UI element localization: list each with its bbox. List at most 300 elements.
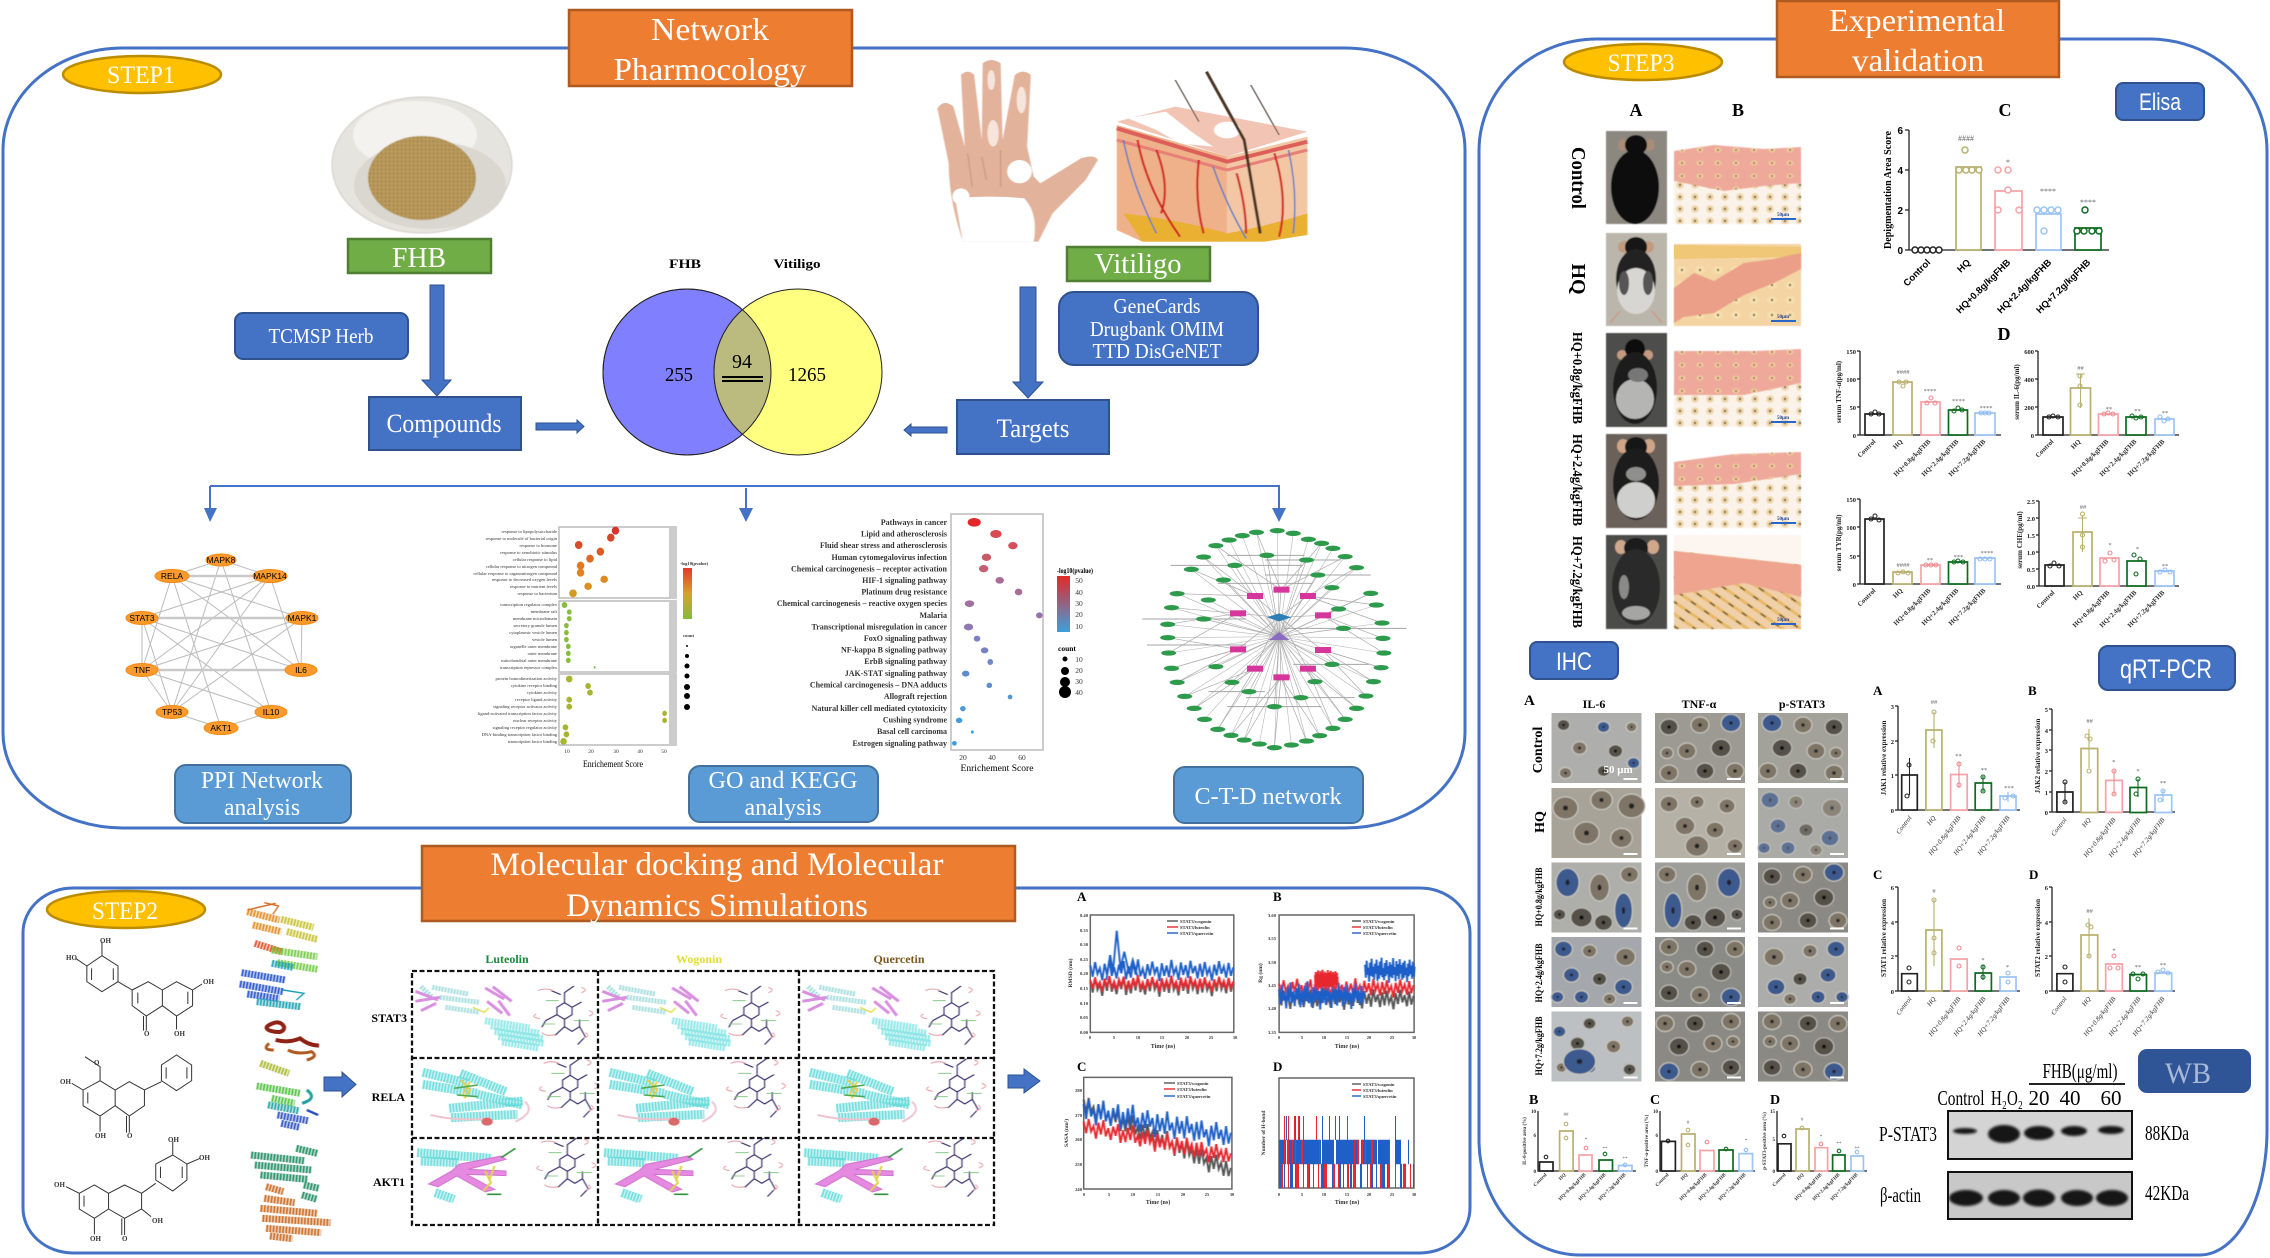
chart: RMSD: 0 bbox=[1089, 1035, 1092, 1040]
chart: RMSD: 20 bbox=[1185, 1035, 1190, 1040]
chart: western blot bbox=[1879, 1059, 2189, 1219]
chart: serum TYR: 0 bbox=[1853, 582, 1856, 589]
chart: serum CHE: 0.0 bbox=[2027, 584, 2035, 591]
chart: serum CHE: 1.0 bbox=[2027, 550, 2035, 557]
protein: RELA ribbon bbox=[257, 1022, 319, 1127]
labels: IHC rows: HQ+2.4g/kgFHB bbox=[1535, 943, 1545, 1002]
molecule: wogonin bbox=[60, 1055, 192, 1140]
heading: ligand columns: Luteolin bbox=[485, 952, 529, 966]
chart: KEGG enrichment: Human cytomegalovirus infection bbox=[831, 553, 948, 562]
chart: KEGG enrichment: 20 bbox=[1075, 666, 1083, 675]
molecule: luteolin: OH bbox=[100, 937, 111, 945]
chart: KEGG enrichment: Enrichement Score bbox=[960, 763, 1034, 773]
chart: serum TYR: HQ bbox=[1892, 587, 1904, 600]
title: Network Pharmacology: Pharmocology bbox=[614, 51, 806, 87]
chart: hydrogen bonds: STAT3/luteolin bbox=[1363, 1088, 1393, 1093]
chart: SASA bbox=[1063, 1059, 1235, 1206]
chart: KEGG enrichment: HIF-1 signaling pathway bbox=[862, 576, 947, 585]
box: disease databases: Drugbank OMIM bbox=[1090, 317, 1224, 341]
chart: serum TNF-alpha: 100 bbox=[1846, 377, 1856, 384]
molecule: quercetin bbox=[54, 1136, 210, 1243]
chart: RMSD: 0.35 bbox=[1080, 928, 1089, 933]
chart: radius of gyration: 10 bbox=[1322, 1035, 1327, 1040]
chart: serum CHE: 0.5 bbox=[2027, 567, 2036, 574]
badge: STEP2 bbox=[47, 891, 205, 928]
chart: STAT2 expression: HQ bbox=[2080, 996, 2093, 1009]
chart: serum CHE: HQ+7.2g/kgFHB bbox=[2127, 589, 2167, 629]
chart: IL-6 positive area: HQ+2.4g/kgFHB bbox=[1578, 1172, 1608, 1202]
chart: STAT1 expression: HQ+2.4g/kgFHB bbox=[1952, 996, 1988, 1039]
chart: STAT1 expression bbox=[1873, 867, 2020, 1039]
chart: JAK2 expression: HQ bbox=[2080, 817, 2093, 830]
heading: ligand columns: Quercetin bbox=[873, 952, 925, 966]
images: IHC micrographs bbox=[1551, 713, 1848, 1082]
chart: western blot: 88KDa bbox=[2145, 1121, 2189, 1145]
heading: IHC columns: p-STAT3 bbox=[1779, 697, 1825, 711]
chart: JAK2 expression: HQ+2.4g/kgFHB bbox=[2107, 817, 2143, 860]
chart: p-STAT3 positive area: 0 bbox=[1772, 1170, 1776, 1175]
chart: STAT2 expression: 2 bbox=[2045, 954, 2048, 961]
labels: mouse groups: HQ bbox=[1567, 263, 1589, 295]
chart: serum TYR: **** bbox=[1980, 550, 1994, 557]
molecule: wogonin: OH bbox=[95, 1132, 106, 1140]
arrow: docking to dynamics bbox=[1008, 1069, 1040, 1093]
title: Molecular docking and Molecular Dynamics Simulations: Molecular docking and Molecular bbox=[490, 847, 944, 883]
chart: RMSD: 0.10 bbox=[1080, 1001, 1089, 1006]
chart: serum CHE: * bbox=[2136, 546, 2139, 553]
chart: PPI network: MAPK1 bbox=[288, 613, 317, 623]
chart: PPI network: TNF bbox=[134, 665, 150, 675]
chart: STAT1 expression: 2 bbox=[1891, 954, 1894, 961]
box: GO and KEGG analysis: analysis bbox=[744, 795, 822, 821]
chart: RMSD: Time (ns) bbox=[1151, 1043, 1175, 1050]
chart: KEGG enrichment: -log10(pvalue) bbox=[1057, 567, 1094, 575]
chart: p-STAT3 positive area: HQ+2.4g/kgFHB bbox=[1812, 1172, 1842, 1202]
molecule: wogonin: O bbox=[94, 1059, 100, 1067]
chart: GO enrichment: cellular response to lipid bbox=[513, 557, 558, 562]
chart: STAT2 expression: * bbox=[2112, 948, 2116, 954]
chart: RMSD: 15 bbox=[1160, 1035, 1165, 1040]
chart: JAK2 expression: 4 bbox=[2045, 728, 2049, 735]
heading: column letters: B bbox=[1732, 100, 1744, 120]
box: Compounds bbox=[369, 397, 521, 450]
chart: hydrogen bonds: 25 bbox=[1390, 1192, 1395, 1197]
chart: STAT2 expression: HQ+0.8g/kgFHB bbox=[2082, 996, 2118, 1039]
chart: TNF-alpha positive area: HQ+0.8g/kgFHB bbox=[1679, 1172, 1709, 1202]
chart: SASA: 15 bbox=[1156, 1192, 1161, 1197]
chart: IL-6 positive area: 6 bbox=[1534, 1134, 1536, 1139]
chart: p-STAT3 positive area bbox=[1763, 1093, 1867, 1202]
badge: STEP3: STEP3 bbox=[1608, 50, 1674, 77]
chart: STAT2 expression: ** bbox=[2135, 964, 2141, 971]
chart: SASA: 270 bbox=[1075, 1113, 1083, 1118]
chart: radius of gyration: 3.55 bbox=[1268, 936, 1277, 941]
chart: radius of gyration: 3.35 bbox=[1268, 1030, 1277, 1035]
molecule: wogonin: O bbox=[127, 1132, 133, 1140]
chart: depigmentation area score: #### bbox=[1958, 134, 1974, 143]
chart: serum TNF-alpha: 0 bbox=[1853, 433, 1856, 440]
chart: KEGG enrichment: Platinum drug resistance bbox=[861, 588, 947, 596]
box: PPI Network analysis bbox=[175, 765, 351, 823]
chart: serum CHE: 2.0 bbox=[2027, 516, 2035, 523]
chart: PPI network: IL10 bbox=[263, 707, 280, 717]
chart: RMSD: 0.15 bbox=[1080, 986, 1089, 991]
chart: GO enrichment: response to decreased oxygen levels bbox=[492, 577, 557, 582]
chart: STAT1 expression: STAT1 relative expression bbox=[1880, 899, 1888, 977]
chart: p-STAT3 positive area: 5 bbox=[1772, 1138, 1776, 1143]
chart: radius of gyration: 25 bbox=[1390, 1035, 1395, 1040]
chart: JAK1 expression: A bbox=[1873, 683, 1883, 698]
chart: KEGG enrichment: Basal cell carcinoma bbox=[877, 727, 947, 736]
chart: RMSD: 0.05 bbox=[1080, 1015, 1089, 1020]
title: Molecular docking and Molecular Dynamics Simulations bbox=[422, 846, 1015, 924]
chart: PPI network: MAPK8 bbox=[207, 555, 236, 565]
labels: IHC rows: HQ+0.8g/kgFHB bbox=[1535, 867, 1545, 926]
images: IHC micrographs: 50 μm bbox=[1604, 764, 1633, 776]
chart: radius of gyration: 20 bbox=[1367, 1035, 1372, 1040]
chart: IL-6 positive area: HQ+7.2g/kgFHB bbox=[1598, 1172, 1628, 1202]
chart: STAT2 expression: ## bbox=[2086, 908, 2094, 915]
chart: GO enrichment: transcription factor binding bbox=[508, 739, 558, 744]
chart: serum IL-6: ** bbox=[2106, 406, 2112, 413]
panel: step 3 experimental validation bbox=[1479, 39, 2267, 1255]
chart: IL-6 positive area: Control bbox=[1533, 1172, 1549, 1188]
box: qRT-PCR: qRT-PCR bbox=[2120, 654, 2212, 684]
chart: GO enrichment: signaling receptor regulator activity bbox=[493, 725, 558, 730]
chart: radius of gyration: 0 bbox=[1278, 1035, 1281, 1040]
chart: serum TYR: serum TYR(pg/ml) bbox=[1835, 514, 1843, 571]
chart: RMSD: STAT3/wogonin bbox=[1180, 919, 1212, 924]
chart: p-STAT3 positive area: ** bbox=[1836, 1142, 1842, 1147]
chart: SASA: 240 bbox=[1075, 1187, 1083, 1192]
box: GO and KEGG analysis bbox=[689, 766, 878, 822]
arrow: vitiligo to targets bbox=[1013, 287, 1043, 398]
molecule: luteolin: O bbox=[144, 1030, 150, 1038]
chart: GO enrichment: nuclear receptor activity bbox=[513, 718, 558, 723]
heading: IHC columns: TNF-α bbox=[1682, 697, 1717, 711]
heading: IHC columns: IL-6 bbox=[1583, 697, 1605, 711]
chart: GO enrichment: 50 bbox=[661, 749, 667, 755]
chart: hydrogen bonds: STAT3/quercetin bbox=[1363, 1094, 1397, 1099]
chart: p-STAT3 positive area: p-STAT3-positive area (%) bbox=[1763, 1112, 1768, 1170]
title: Network Pharmacology bbox=[569, 10, 852, 87]
chart: p-STAT3 positive area: HQ+7.2g/kgFHB bbox=[1830, 1172, 1860, 1202]
venn diagram: 94 bbox=[732, 351, 752, 373]
chart: RMSD: STAT3/quercetin bbox=[1180, 931, 1214, 936]
chart: serum TNF-alpha: HQ+7.2g/kgFHB bbox=[1948, 438, 1988, 478]
chart: KEGG enrichment bbox=[777, 514, 1094, 773]
chart: STAT2 expression: 6 bbox=[2045, 885, 2049, 892]
box: qRT-PCR bbox=[2099, 646, 2235, 690]
chart: serum TYR: HQ+2.4g/kgFHB bbox=[1921, 587, 1961, 627]
chart: radius of gyration: 3.45 bbox=[1268, 983, 1277, 988]
title: Experimental validation: validation bbox=[1852, 42, 1984, 78]
chart: GO enrichment: transcription regulator complex bbox=[500, 602, 558, 607]
chart: KEGG enrichment: 20 bbox=[959, 753, 967, 762]
chart: SASA: 0 bbox=[1083, 1192, 1086, 1197]
chart: KEGG enrichment: 60 bbox=[1018, 753, 1026, 762]
chart: serum TNF-alpha: HQ bbox=[1892, 438, 1904, 451]
chart: STAT1 expression: C bbox=[1873, 867, 1882, 882]
title: Network Pharmacology: Network bbox=[651, 11, 769, 47]
molecule: quercetin: OH bbox=[199, 1154, 210, 1162]
molecule: luteolin: OH bbox=[203, 978, 214, 986]
chart: serum TNF-alpha: HQ+0.8g/kgFHB bbox=[1893, 438, 1933, 478]
chart: GO enrichment: outer membrane bbox=[528, 651, 557, 656]
venn diagram: 255 bbox=[665, 364, 693, 386]
chart: RMSD: A bbox=[1077, 889, 1087, 904]
chart: SASA: 30 bbox=[1230, 1192, 1235, 1197]
labels: IHC rows: HQ bbox=[1533, 811, 1548, 833]
chart: STAT1 expression: HQ+0.8g/kgFHB bbox=[1927, 996, 1963, 1039]
chart: PPI network: RELA bbox=[161, 571, 183, 581]
label: FHB: FHB bbox=[392, 243, 446, 274]
chart: STAT1 expression: # bbox=[1932, 888, 1936, 895]
images: skin sections: 50μm bbox=[1777, 315, 1790, 320]
chart: GO enrichment: -log10(pvalue) bbox=[680, 561, 709, 566]
chart: JAK2 expression: Control bbox=[2050, 817, 2069, 838]
box: Elisa bbox=[2116, 83, 2204, 120]
chart: TNF-alpha positive area: Control bbox=[1655, 1172, 1671, 1188]
chart: KEGG enrichment: Chemical carcinogenesis – reactive oxygen species bbox=[777, 599, 947, 608]
chart: serum IL-6: HQ+0.8g/kgFHB bbox=[2071, 438, 2111, 478]
labels: mouse groups: HQ+2.4g/kgFHB bbox=[1570, 434, 1585, 526]
box: disease databases bbox=[1059, 292, 1258, 365]
chart: depigmentation area score: HQ bbox=[1955, 257, 1973, 275]
chart: JAK1 expression: HQ+2.4g/kgFHB bbox=[1952, 815, 1988, 858]
chart: serum IL-6: ** bbox=[2134, 408, 2141, 415]
molecule: wogonin: OH bbox=[60, 1078, 71, 1086]
chart: SASA: 5 bbox=[1108, 1192, 1111, 1197]
chart: STAT2 expression: 0 bbox=[2045, 989, 2048, 996]
chart: serum TNF-alpha bbox=[1835, 349, 2001, 478]
chart: western blot: 60 bbox=[2100, 1086, 2122, 1110]
chart: STAT2 expression: 4 bbox=[2045, 920, 2049, 927]
chart: IL-6 positive area: 0 bbox=[1534, 1170, 1536, 1175]
chart: hydrogen bonds: STAT3/wogonin bbox=[1363, 1082, 1395, 1087]
chart: JAK2 expression bbox=[2028, 683, 2175, 860]
chart: p-STAT3 positive area: HQ+0.8g/kgFHB bbox=[1794, 1172, 1824, 1202]
chart: radius of gyration: 5 bbox=[1301, 1035, 1304, 1040]
chart: SASA: STAT3/luteolin bbox=[1177, 1087, 1207, 1092]
chart: serum TYR: ** bbox=[1927, 557, 1933, 564]
heading: column letters bbox=[1630, 100, 2012, 344]
chart: KEGG enrichment: JAK-STAT signaling pathway bbox=[845, 669, 947, 678]
chart: radius of gyration: 3.40 bbox=[1268, 1006, 1277, 1011]
chart: KEGG enrichment: 20 bbox=[1075, 610, 1083, 619]
chart: p-STAT3 positive area: Control bbox=[1772, 1172, 1788, 1188]
chart: GO enrichment: response to xenobiotic stimulus bbox=[500, 550, 557, 555]
chart: KEGG enrichment: Chemical carcinogenesis – DNA adducts bbox=[810, 680, 947, 690]
chart: JAK2 expression: * bbox=[2136, 768, 2140, 775]
chart: GO enrichment: response to nutrient levels bbox=[510, 584, 557, 589]
chart: depigmentation area score: Depigmentation Area Score bbox=[1883, 130, 1894, 249]
chart: KEGG enrichment: Allograft rejection bbox=[884, 692, 948, 701]
chart: GO enrichment: response to molecule of bacterial origin bbox=[486, 536, 558, 541]
chart: GO enrichment: count bbox=[683, 633, 694, 638]
badge: STEP1: STEP1 bbox=[107, 62, 175, 89]
labels: mouse groups: HQ+7.2g/kgFHB bbox=[1570, 536, 1585, 628]
chart: serum IL-6: Control bbox=[2035, 438, 2055, 459]
chart: KEGG enrichment: Estrogen signaling pathway bbox=[852, 739, 947, 748]
chart: SASA: C bbox=[1077, 1059, 1086, 1074]
chart: serum TYR: Control bbox=[1857, 587, 1877, 608]
chart: IL-6 positive area: HQ+0.8g/kgFHB bbox=[1558, 1172, 1588, 1202]
chart: p-STAT3 positive area: * bbox=[1820, 1135, 1823, 1140]
chart: TNF-alpha positive area: HQ bbox=[1680, 1173, 1689, 1182]
chart: serum CHE bbox=[2016, 499, 2179, 629]
box: disease databases: GeneCards bbox=[1114, 294, 1200, 318]
chart: KEGG enrichment: FoxO signaling pathway bbox=[864, 634, 947, 643]
box: TCMSP Herb bbox=[235, 313, 408, 359]
chart: depigmentation area score: * bbox=[2006, 158, 2010, 167]
chart: hydrogen bonds: 20 bbox=[1367, 1192, 1372, 1197]
chart: KEGG enrichment: ErbB signaling pathway bbox=[864, 657, 947, 666]
chart: JAK1 expression: 2 bbox=[1891, 739, 1894, 746]
box: C-T-D network: C-T-D network bbox=[1194, 784, 1342, 810]
chart: IL-6 positive area: * bbox=[1585, 1138, 1588, 1143]
chart: STAT1 expression: HQ+7.2g/kgFHB bbox=[1976, 996, 2012, 1039]
chart: serum TNF-alpha: **** bbox=[1924, 388, 1936, 395]
image: FHB powder in bowl bbox=[332, 97, 512, 233]
arrow: proteins to docking bbox=[324, 1072, 356, 1097]
chart: radius of gyration: 3.60 bbox=[1268, 913, 1277, 918]
chart: depigmentation area score: **** bbox=[2080, 198, 2096, 207]
chart: TNF-alpha positive area: HQ+2.4g/kgFHB bbox=[1698, 1172, 1728, 1202]
box: C-T-D network bbox=[1174, 767, 1363, 823]
chart: GO enrichment: vesicle lumen bbox=[532, 637, 558, 642]
heading: target rows: STAT3 bbox=[371, 1011, 407, 1025]
chart: GO enrichment: transcription repressor complex bbox=[500, 665, 558, 670]
chart: IL-6 positive area: HQ bbox=[1558, 1173, 1567, 1182]
chart: serum IL-6: serum IL-6(pg/ml) bbox=[2013, 364, 2021, 420]
chart: IL-6 positive area: ** bbox=[1622, 1157, 1628, 1162]
venn diagram: Vitiligo bbox=[774, 256, 820, 271]
chart: GO enrichment: cytokine receptor binding bbox=[511, 683, 558, 688]
chart: JAK1 expression: ** bbox=[1981, 767, 1987, 774]
chart: radius of gyration: STAT3/quercetin bbox=[1363, 931, 1397, 936]
chart: depigmentation area score: HQ+0.8g/kgFHB bbox=[1954, 257, 2013, 316]
chart: IL-6 positive area: ## bbox=[1564, 1113, 1569, 1118]
chart: radius of gyration: Rg (nm) bbox=[1257, 963, 1264, 983]
chart: p-STAT3 positive area: ** bbox=[1854, 1147, 1860, 1152]
chart: depigmentation area score: Control bbox=[1901, 257, 1933, 289]
chart: depigmentation area score: 6 bbox=[1897, 126, 1903, 137]
chart: SASA: 20 bbox=[1181, 1192, 1186, 1197]
chart: depigmentation area score: HQ+7.2g/kgFHB bbox=[2034, 257, 2093, 316]
chart: JAK1 expression: 1 bbox=[1891, 773, 1894, 780]
image: hand with vitiligo bbox=[937, 60, 1098, 242]
chart: STAT1 expression: Control bbox=[1895, 996, 1914, 1017]
chart: STAT2 expression: STAT2 relative expression bbox=[2034, 899, 2042, 977]
chart: GO enrichment: 40 bbox=[637, 749, 643, 755]
chart: SASA: STAT3/wogonin bbox=[1177, 1081, 1209, 1086]
chart: KEGG enrichment: 50 bbox=[1075, 576, 1083, 585]
chart: JAK2 expression: 0 bbox=[2045, 810, 2048, 817]
box: GO and KEGG analysis: GO and KEGG bbox=[708, 768, 858, 794]
heading: column letters: D bbox=[1998, 324, 2010, 344]
chart: GO enrichment bbox=[473, 527, 709, 769]
chart: depigmentation area score: **** bbox=[2040, 187, 2056, 196]
chart: hydrogen bonds: 5 bbox=[1301, 1192, 1304, 1197]
chart: serum TYR: HQ+0.8g/kgFHB bbox=[1893, 587, 1933, 627]
heading: column letters: C bbox=[1998, 100, 2012, 120]
chart: JAK2 expression: HQ+0.8g/kgFHB bbox=[2082, 817, 2118, 860]
images: skin sections: 50μm bbox=[1777, 517, 1790, 522]
chart: IL-6 positive area: ** bbox=[1602, 1147, 1608, 1152]
chart: IL-6 positive area: B bbox=[1529, 1093, 1538, 1108]
images: skin sections: 50μm bbox=[1777, 213, 1790, 218]
chart: KEGG enrichment: Chemical carcinogenesis – receptor activation bbox=[791, 564, 948, 574]
heading: ligand columns: Wogonin bbox=[676, 952, 722, 966]
chart: STAT1 expression: * bbox=[2006, 964, 2009, 971]
chart: GO enrichment: 30 bbox=[613, 749, 619, 755]
chart: KEGG enrichment: 30 bbox=[1075, 677, 1083, 686]
chart: JAK2 expression: 5 bbox=[2045, 707, 2049, 714]
labels: IHC rows: Control bbox=[1531, 727, 1546, 773]
chart: JAK1 expression: 3 bbox=[1891, 704, 1895, 711]
chart: JAK2 expression: JAK2 relative expression bbox=[2034, 719, 2042, 793]
chart: STAT1 expression: 4 bbox=[1891, 920, 1895, 927]
chart: JAK1 expression: *** bbox=[2004, 785, 2014, 792]
chart: serum TNF-alpha: **** bbox=[1952, 398, 1965, 405]
chart: SASA: Time (ns) bbox=[1146, 1199, 1170, 1206]
protein: STAT3 ribbon bbox=[240, 903, 317, 1007]
chart: hydrogen bonds: 30 bbox=[1412, 1192, 1417, 1197]
panel: docking poses bbox=[412, 971, 994, 1225]
chart: SASA: STAT3/quercetin bbox=[1177, 1094, 1211, 1099]
chart: serum TYR: 50 bbox=[1850, 554, 1856, 561]
badge: STEP1 bbox=[63, 56, 221, 93]
chart: hydrogen bonds: 15 bbox=[1345, 1192, 1350, 1197]
chart: serum IL-6: ## bbox=[2077, 365, 2084, 372]
chart: serum IL-6: HQ+7.2g/kgFHB bbox=[2127, 438, 2167, 478]
chart: serum CHE: 2.5 bbox=[2027, 499, 2036, 506]
chart: serum IL-6: HQ+2.4g/kgFHB bbox=[2099, 438, 2139, 478]
chart: GO enrichment: response to lipopolysaccharide bbox=[502, 529, 557, 534]
venn diagram: FHB bbox=[669, 256, 701, 271]
chart: GO enrichment: protein homodimerization activity bbox=[496, 676, 558, 681]
chart: radius of gyration bbox=[1257, 889, 1417, 1050]
venn diagram bbox=[603, 256, 882, 455]
labels: IHC rows: HQ+7.2g/kgFHB bbox=[1535, 1016, 1545, 1076]
chart: GO enrichment: 20 bbox=[588, 749, 594, 755]
label: FHB bbox=[348, 239, 491, 274]
chart: GO enrichment: ligand-activated transcription factor activity bbox=[478, 711, 558, 716]
chart: SASA: 250 bbox=[1075, 1162, 1083, 1167]
chart: KEGG enrichment: 40 bbox=[1075, 688, 1083, 697]
chart: KEGG enrichment: Lipid and atherosclerosis bbox=[861, 530, 947, 538]
chart: western blot: Control bbox=[1938, 1086, 1985, 1110]
chart: serum TYR: #### bbox=[1896, 562, 1910, 569]
chart: serum TNF-alpha: #### bbox=[1896, 369, 1910, 376]
chart: RMSD: 30 bbox=[1233, 1035, 1238, 1040]
venn diagram: 1265 bbox=[788, 364, 826, 386]
chart: JAK2 expression: 1 bbox=[2045, 790, 2048, 797]
badge: STEP2: STEP2 bbox=[92, 898, 158, 925]
chart: JAK2 expression: 3 bbox=[2045, 748, 2049, 755]
box: disease databases: TTD DisGeNET bbox=[1092, 339, 1222, 363]
chart: depigmentation area score bbox=[1883, 126, 2109, 316]
chart: STAT1 expression: 6 bbox=[1891, 885, 1895, 892]
chart: serum CHE: HQ+2.4g/kgFHB bbox=[2099, 589, 2139, 629]
chart: serum CHE: serum CHE(pg/ml) bbox=[2016, 511, 2024, 569]
chart: SASA: 260 bbox=[1075, 1137, 1083, 1142]
chart: radius of gyration: STAT3/wogonin bbox=[1363, 919, 1395, 924]
chart: serum TNF-alpha: Control bbox=[1857, 438, 1877, 459]
chart: STAT1 expression: 0 bbox=[1891, 989, 1894, 996]
chart: SASA: 280 bbox=[1075, 1088, 1083, 1093]
